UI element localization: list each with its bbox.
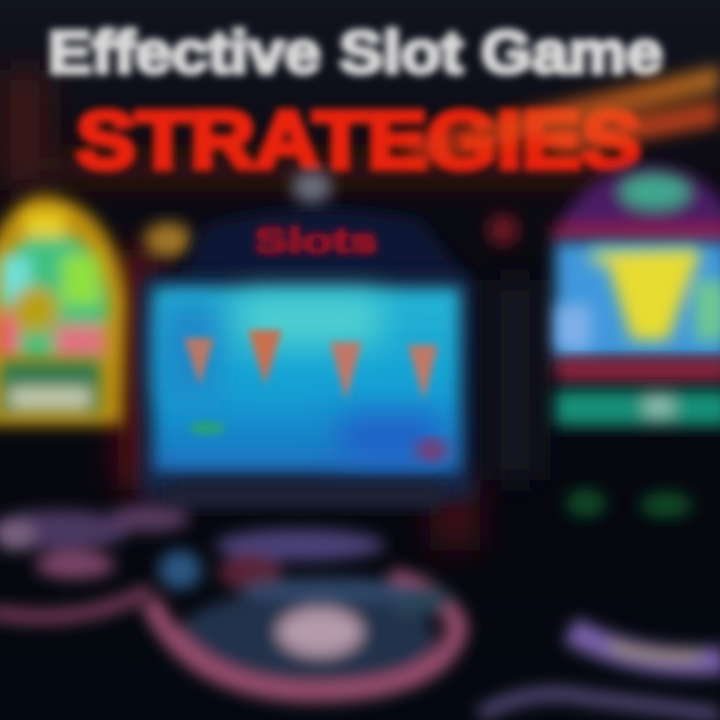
- right slot machine: [552, 165, 720, 518]
- rainbow screen: [0, 212, 108, 360]
- lower panel: [0, 362, 100, 414]
- backdrop glow: [0, 70, 620, 550]
- yellow symbol: [556, 248, 720, 350]
- title: [48, 19, 663, 186]
- red sign: Slots: [254, 220, 378, 261]
- monitor base: [170, 482, 440, 508]
- monitor screen: [154, 288, 460, 472]
- orange light streaks: [400, 65, 720, 165]
- cabinet arch: [0, 195, 127, 425]
- center monitor: [140, 171, 474, 508]
- red band: [555, 358, 720, 382]
- title line: red: STRATEGIES: [76, 95, 641, 186]
- table chips left: [0, 504, 190, 617]
- green accents: [189, 421, 225, 435]
- red side light: [487, 214, 519, 246]
- screen highlights: [160, 295, 440, 460]
- left slot machine: [0, 195, 127, 425]
- teal band: [555, 390, 720, 426]
- central table ring: [150, 529, 458, 692]
- top crown: [552, 165, 720, 245]
- green lights: [566, 489, 692, 518]
- monitor top housing: [180, 209, 470, 280]
- machine screen: [555, 242, 720, 360]
- white star glint: [292, 171, 332, 203]
- reel symbols: [184, 330, 438, 400]
- right table chips: [480, 630, 720, 715]
- title line: white: Effective Slot Game: [48, 19, 663, 86]
- small gold ornament: [144, 222, 192, 258]
- monitor bezel: [140, 274, 474, 500]
